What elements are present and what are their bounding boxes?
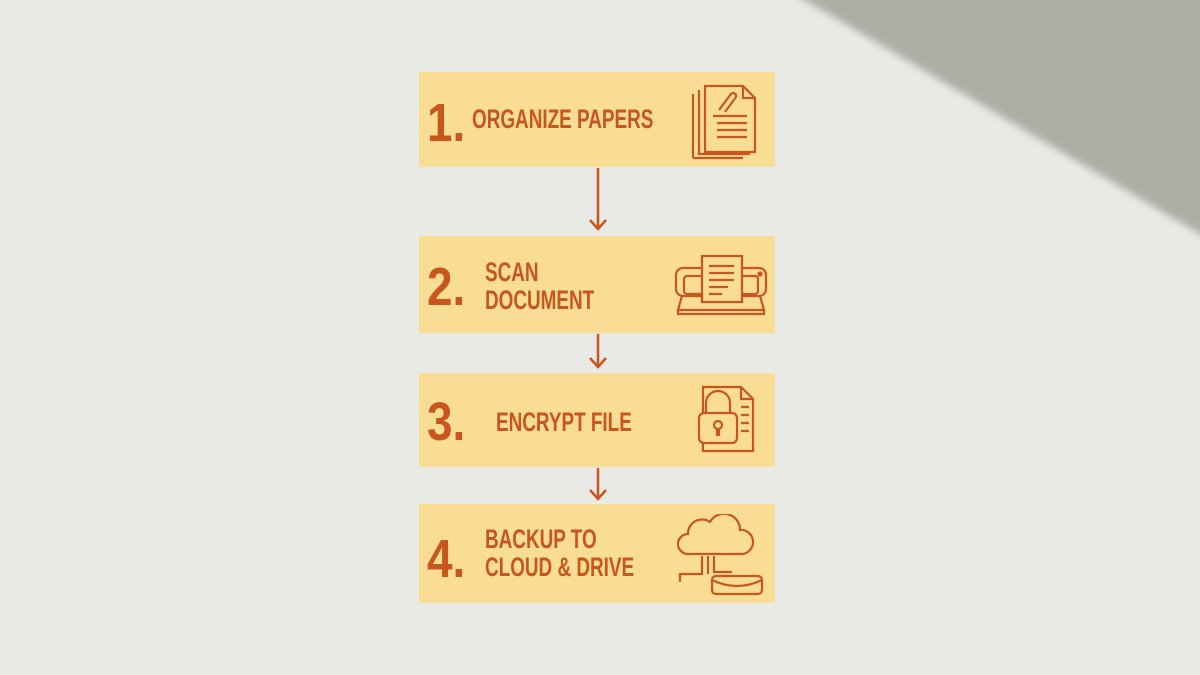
text: backup to cloud & drive: BACKUP TO — [485, 524, 597, 554]
icon: cloud and drive — [676, 514, 764, 596]
text: scan document: SCAN — [485, 257, 539, 287]
text: backup to cloud & drive — [485, 524, 634, 582]
panel: step 3 — [419, 373, 775, 467]
text: scan document: DOCUMENT — [485, 285, 594, 315]
icon: papers with clip — [692, 84, 756, 160]
panel: step 1 — [419, 72, 775, 167]
icon: scanner — [674, 254, 768, 316]
panel: step 4 — [419, 504, 775, 603]
panel: step 2 — [419, 236, 775, 333]
number 2: 2. — [427, 257, 465, 317]
number 3: 3. — [427, 392, 465, 452]
text: scan document — [485, 257, 594, 315]
icon: locked file — [698, 386, 754, 452]
arrow 1 — [589, 168, 607, 231]
text: organize papers: ORGANIZE PAPERS — [472, 104, 653, 134]
arrow 3 — [589, 468, 607, 501]
number 1: 1. — [427, 93, 465, 153]
text: backup to cloud & drive: CLOUD & DRIVE — [485, 552, 634, 582]
text: encrypt file: ENCRYPT FILE — [496, 407, 632, 437]
number 4: 4. — [427, 529, 465, 589]
arrow 2 — [589, 334, 607, 369]
